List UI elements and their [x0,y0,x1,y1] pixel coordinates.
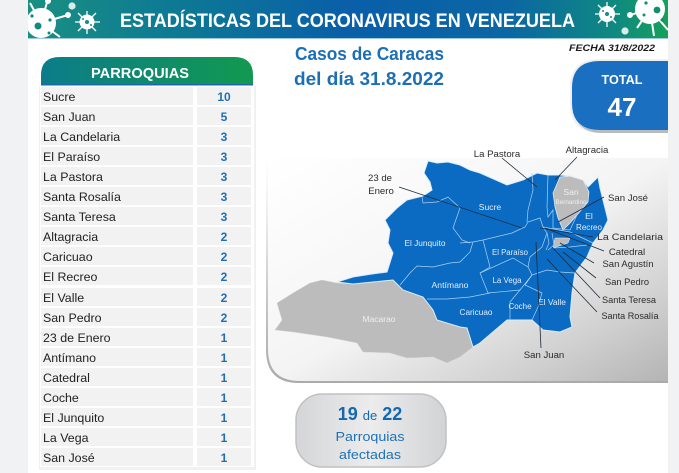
row: Altagracia: 2 [221,230,228,244]
row: San José [41,448,251,466]
map: external parish labels: La Pastora [474,149,521,160]
map: external parish labels: Santa Teresa [602,295,657,306]
map: blue parishes [337,161,608,347]
row: Santa Teresa [41,207,251,225]
row: Catedral: Catedral [43,371,90,385]
row: La Candelaria [41,127,251,145]
row: La Pastora [41,167,251,185]
map: external parish labels [368,145,664,361]
icon: left virus cluster [26,0,100,38]
panel: parroquias table [39,57,256,470]
row: Antímano: 1 [221,351,228,365]
row: San José: San José [43,451,95,465]
row: Santa Rosalía [41,187,251,205]
panel: parroquias afectadas: afectadas [339,447,402,462]
date: FECHA 31/8/2022 [569,42,656,53]
map: parish names inside map: Sucre [479,202,501,212]
map: external parish labels: La Candelaria [597,232,664,243]
row: La Vega [41,428,251,446]
map: external parish labels: Enero [368,186,394,197]
row: Antímano [41,348,251,366]
row: San Pedro: San Pedro [43,311,102,325]
panel: parroquias afectadas [296,394,446,467]
map: parish names inside map: El [585,211,593,221]
row: El Valle: El Valle [43,291,84,305]
map: parish names inside map: Bernardino [556,199,587,206]
row: La Vega: 1 [221,431,228,445]
map: parish names inside map: Recreo [576,222,602,232]
table header [41,57,253,86]
panel: map of Caracas [266,145,668,383]
map: parish names inside map: Caricuao [460,307,493,317]
row: Antímano: Antímano [43,351,96,365]
row: La Pastora: La Pastora [43,170,103,184]
row: El Junquito [41,408,251,426]
map: external parish labels: 23 de [368,173,392,184]
row: Sucre: Sucre [43,90,75,104]
map: parish names inside map: Coche [508,301,532,311]
row: El Valle [41,288,251,306]
row: Altagracia [41,227,251,245]
heading: casos de Caracas: del día 31.8.2022 [294,68,444,89]
row: San Juan: 5 [221,110,228,124]
row: 23 de Enero: 1 [221,331,228,345]
map: San Agustín grey parish [553,238,570,248]
row: 23 de Enero: 23 de Enero [43,331,111,345]
heading: casos de Caracas [294,43,444,89]
map: San Bernardino grey parish [553,176,589,230]
row: El Paraíso: 3 [221,150,228,164]
row: Coche [41,388,251,406]
row: San José: 1 [221,451,228,465]
table header: PARROQUIAS [91,66,189,82]
header banner [26,0,668,39]
map: external parish labels: Catedral [609,247,645,258]
row: 23 de Enero [41,328,251,346]
row: Catedral: 1 [221,371,228,385]
row: La Candelaria: La Candelaria [43,130,120,144]
panel: parroquias afectadas: Parroquias [336,429,405,444]
row: Santa Rosalía: 3 [221,190,228,204]
icon: right virus cluster [595,0,668,36]
map: parish names inside map: Antímano [432,280,469,290]
map: leader lines [399,157,604,348]
map: parish names inside map: La Vega [492,275,522,285]
row: Santa Teresa: 3 [221,210,228,224]
title: ESTADÍSTICAS DEL CORONAVIRUS EN VENEZUELA [120,10,575,32]
row: La Pastora: 3 [221,170,228,184]
map: parish names inside map: El Junquito [404,238,446,248]
row: El Recreo: 2 [221,270,228,284]
row: El Junquito: 1 [221,411,228,425]
row: Santa Rosalía: Santa Rosalía [43,190,121,204]
map: parish names inside map: El Valle [538,297,566,307]
row: El Recreo: El Recreo [43,270,98,284]
row: Coche: Coche [43,391,79,405]
row: Sucre [41,87,251,105]
map: external parish labels: San Agustín [602,259,654,270]
row: Catedral [41,368,251,386]
map: external parish labels: San Pedro [605,277,649,288]
row: Santa Teresa: Santa Teresa [43,210,116,224]
row: El Paraíso: El Paraíso [43,150,100,164]
map: parish names inside map: El Paraíso [492,247,528,257]
row: El Junquito: El Junquito [43,411,104,425]
row: El Paraíso [41,147,251,165]
heading: casos de Caracas: Casos de Caracas [295,43,444,64]
row: Caricuao: Caricuao [43,250,93,264]
row: Coche: 1 [221,391,228,405]
map: external parish labels: San Juan [524,350,564,361]
panel: total: TOTAL [602,72,643,87]
map: external parish labels: San José [608,193,648,204]
map: Macarao grey parish [275,280,473,363]
panel: total: 47 [608,92,636,122]
map: parish names inside map: Macarao [362,314,396,324]
row: Altagracia: Altagracia [43,230,98,244]
row: El Valle: 2 [221,291,228,305]
map: external parish labels: Altagracia [566,145,609,156]
row: San Pedro: 2 [221,311,228,325]
row: El Recreo [41,267,251,285]
row: La Candelaria: 3 [221,130,228,144]
panel: parroquias afectadas: 19 de 22 [338,404,402,424]
row: San Juan [41,107,251,125]
row: Caricuao [41,247,251,265]
row: Sucre: 10 [217,90,231,104]
panel: total [570,59,668,133]
row: La Vega: La Vega [43,431,89,445]
row: Caricuao: 2 [221,250,228,264]
row: San Juan: San Juan [43,110,95,124]
map: external parish labels: Santa Rosalía [602,311,659,322]
map: parish names inside map: San [563,187,579,197]
map: parish names inside map [362,187,602,324]
row: San Pedro [41,308,251,326]
